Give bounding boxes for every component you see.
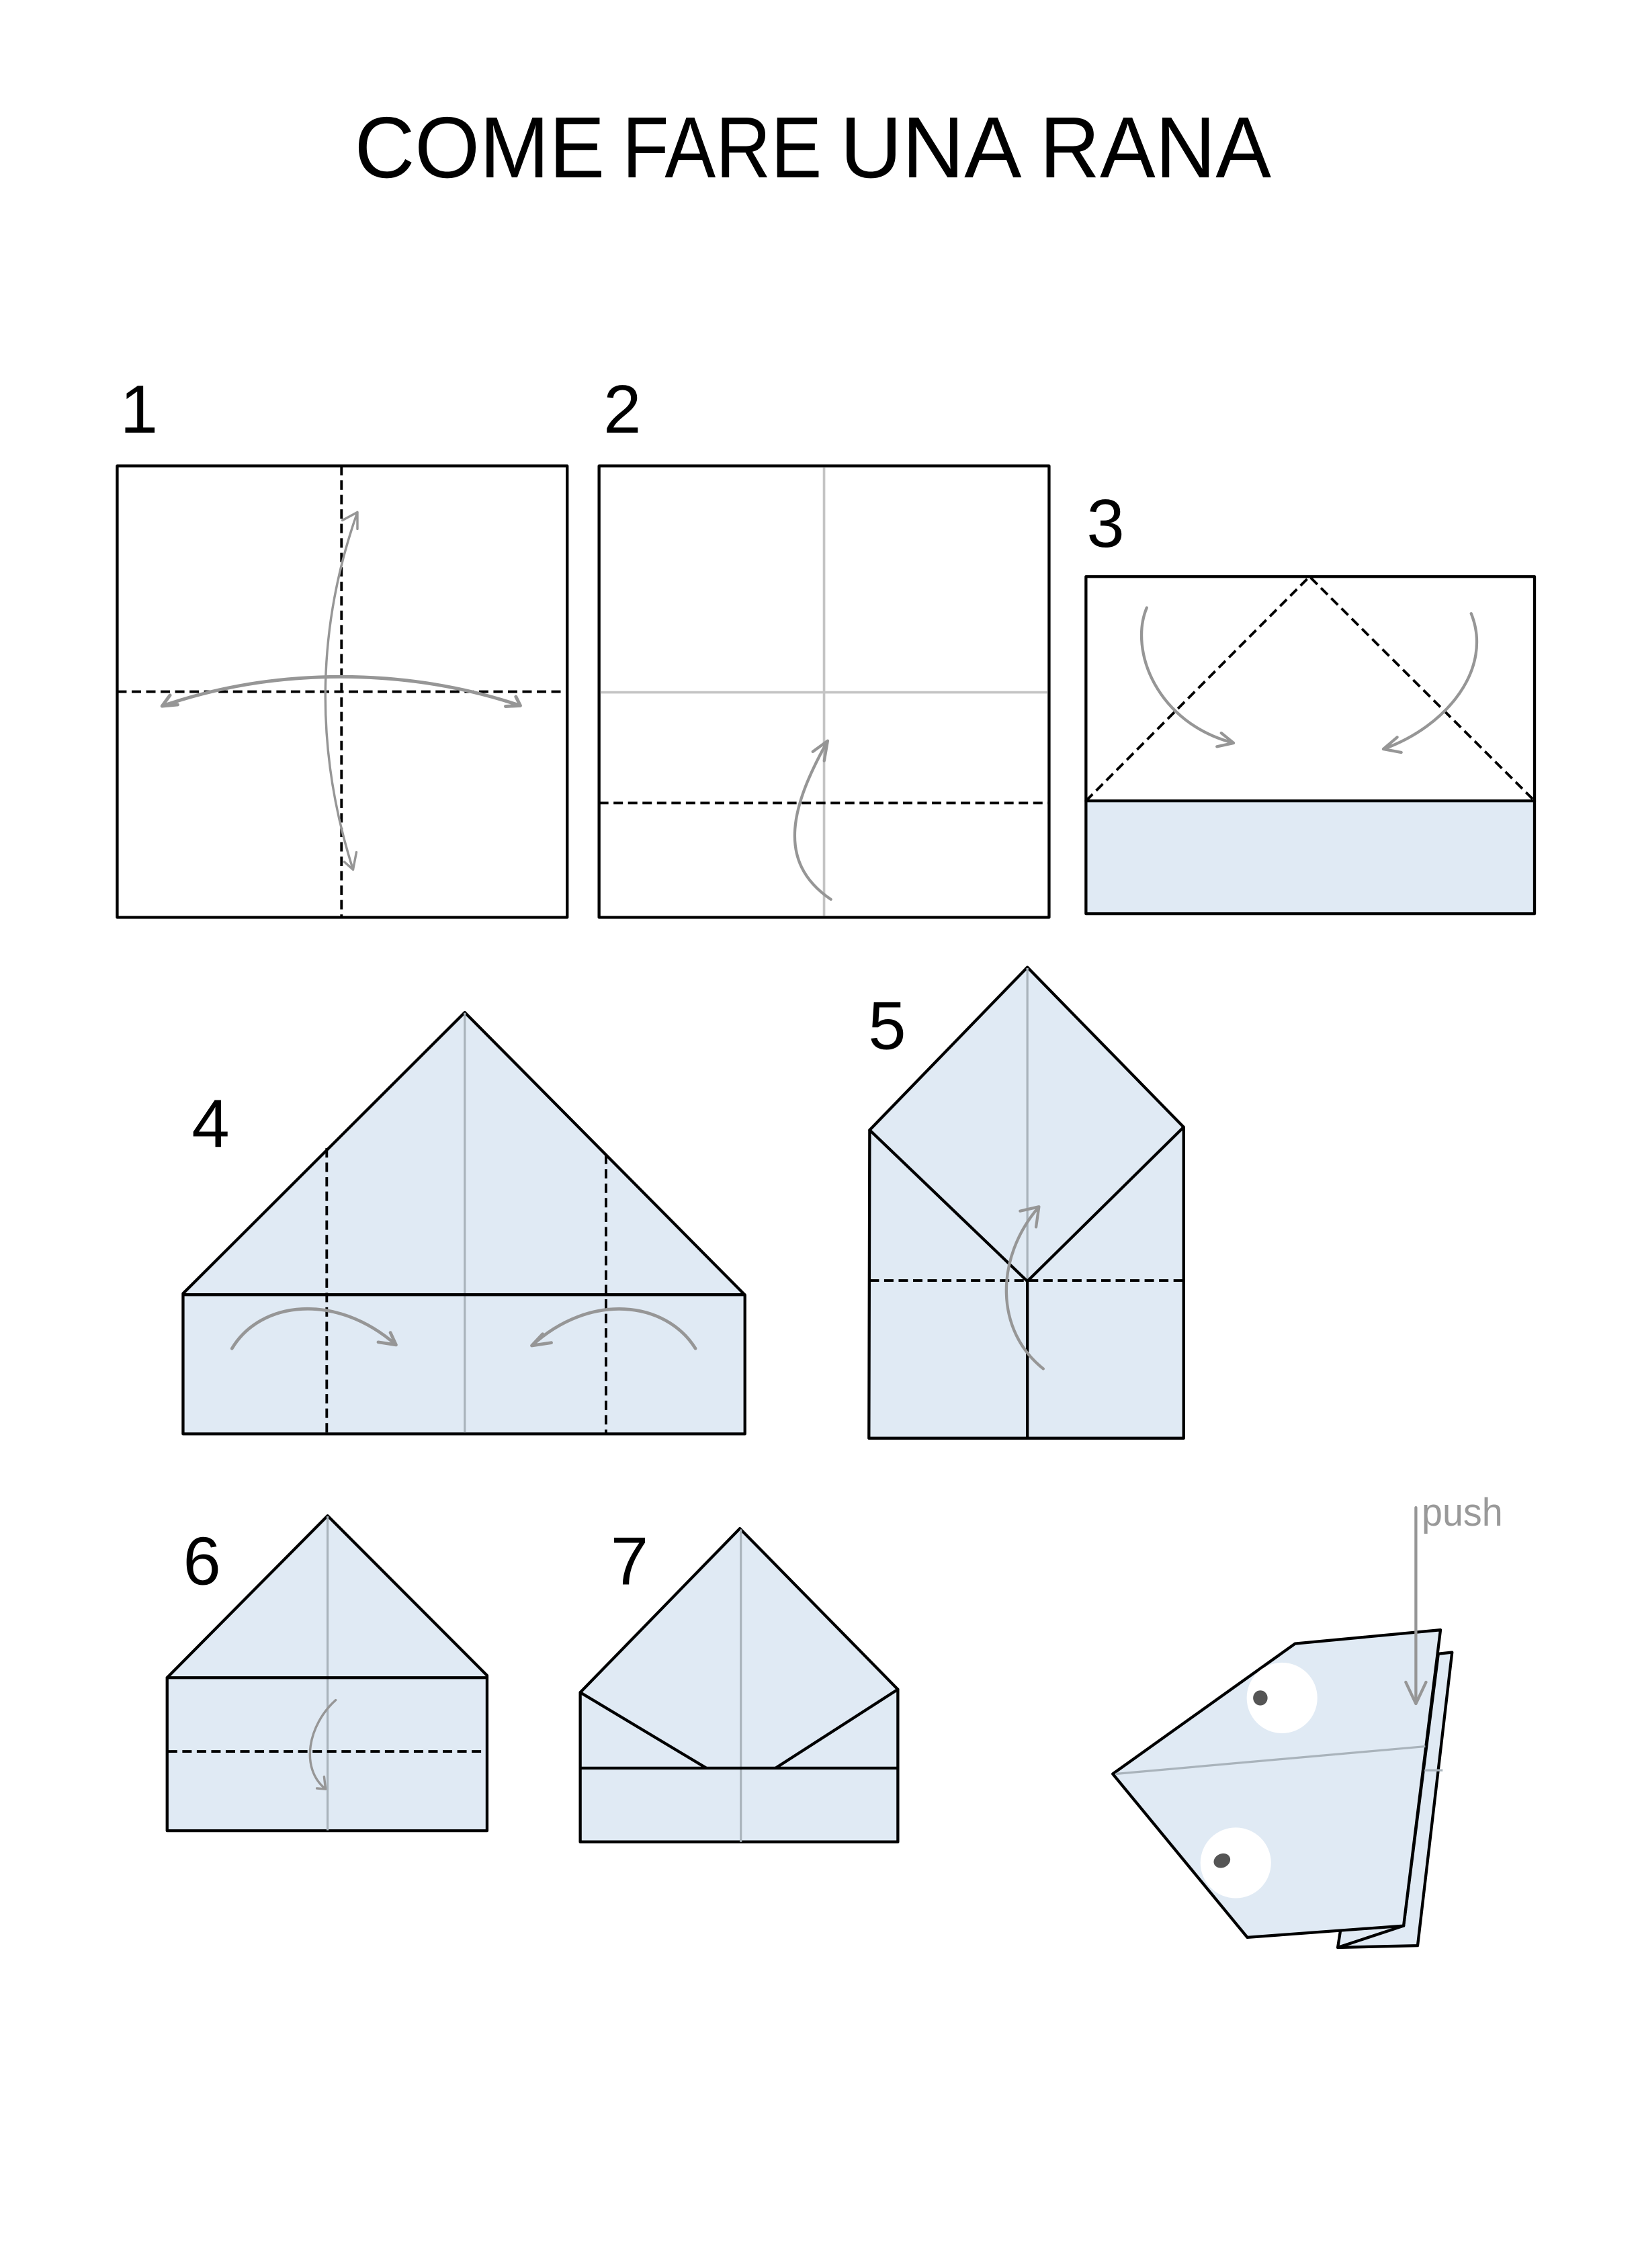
title: UNA	[840, 99, 1022, 196]
step 4 number: 4	[191, 1086, 230, 1162]
arrow: horizontal fold both ways	[162, 677, 520, 706]
step 3 number: 3	[1086, 486, 1125, 562]
step 5 diagram	[869, 967, 1184, 1438]
step 5 number: 5	[868, 988, 906, 1063]
step 3 diagram	[1086, 576, 1535, 914]
title: RANA	[1039, 99, 1271, 196]
eye: lower	[1201, 1827, 1271, 1898]
step 1 number: 1	[120, 372, 158, 447]
arrow: right corner fold	[1383, 613, 1477, 752]
finished frog	[1113, 1491, 1503, 1948]
eye: upper	[1247, 1663, 1318, 1733]
title: COME	[355, 99, 605, 196]
back layer of paper	[1338, 1653, 1452, 1948]
arrow: fold top down	[310, 1700, 336, 1789]
step 4 diagram	[183, 1012, 745, 1434]
title: FARE	[622, 99, 822, 196]
step 2 diagram	[599, 466, 1049, 917]
step 7 number: 7	[611, 1523, 648, 1599]
arrow: fold bottom up	[1006, 1207, 1043, 1368]
arrow: fold bottom edge up	[795, 741, 831, 900]
front body of frog	[1113, 1630, 1440, 1937]
step 7 diagram	[580, 1528, 898, 1842]
step 2 number: 2	[603, 372, 641, 447]
arrow: left corner fold	[1141, 608, 1234, 746]
arrow: vertical fold both ways	[325, 512, 357, 869]
title	[355, 99, 1271, 196]
arrow: push down	[1406, 1508, 1426, 1704]
step 6 diagram	[167, 1516, 487, 1831]
arrow: left side fold	[232, 1309, 396, 1348]
push label: push	[1422, 1491, 1503, 1534]
step 1 diagram	[117, 466, 567, 917]
arrow: right side fold	[531, 1309, 695, 1348]
step 6 number: 6	[183, 1523, 221, 1599]
